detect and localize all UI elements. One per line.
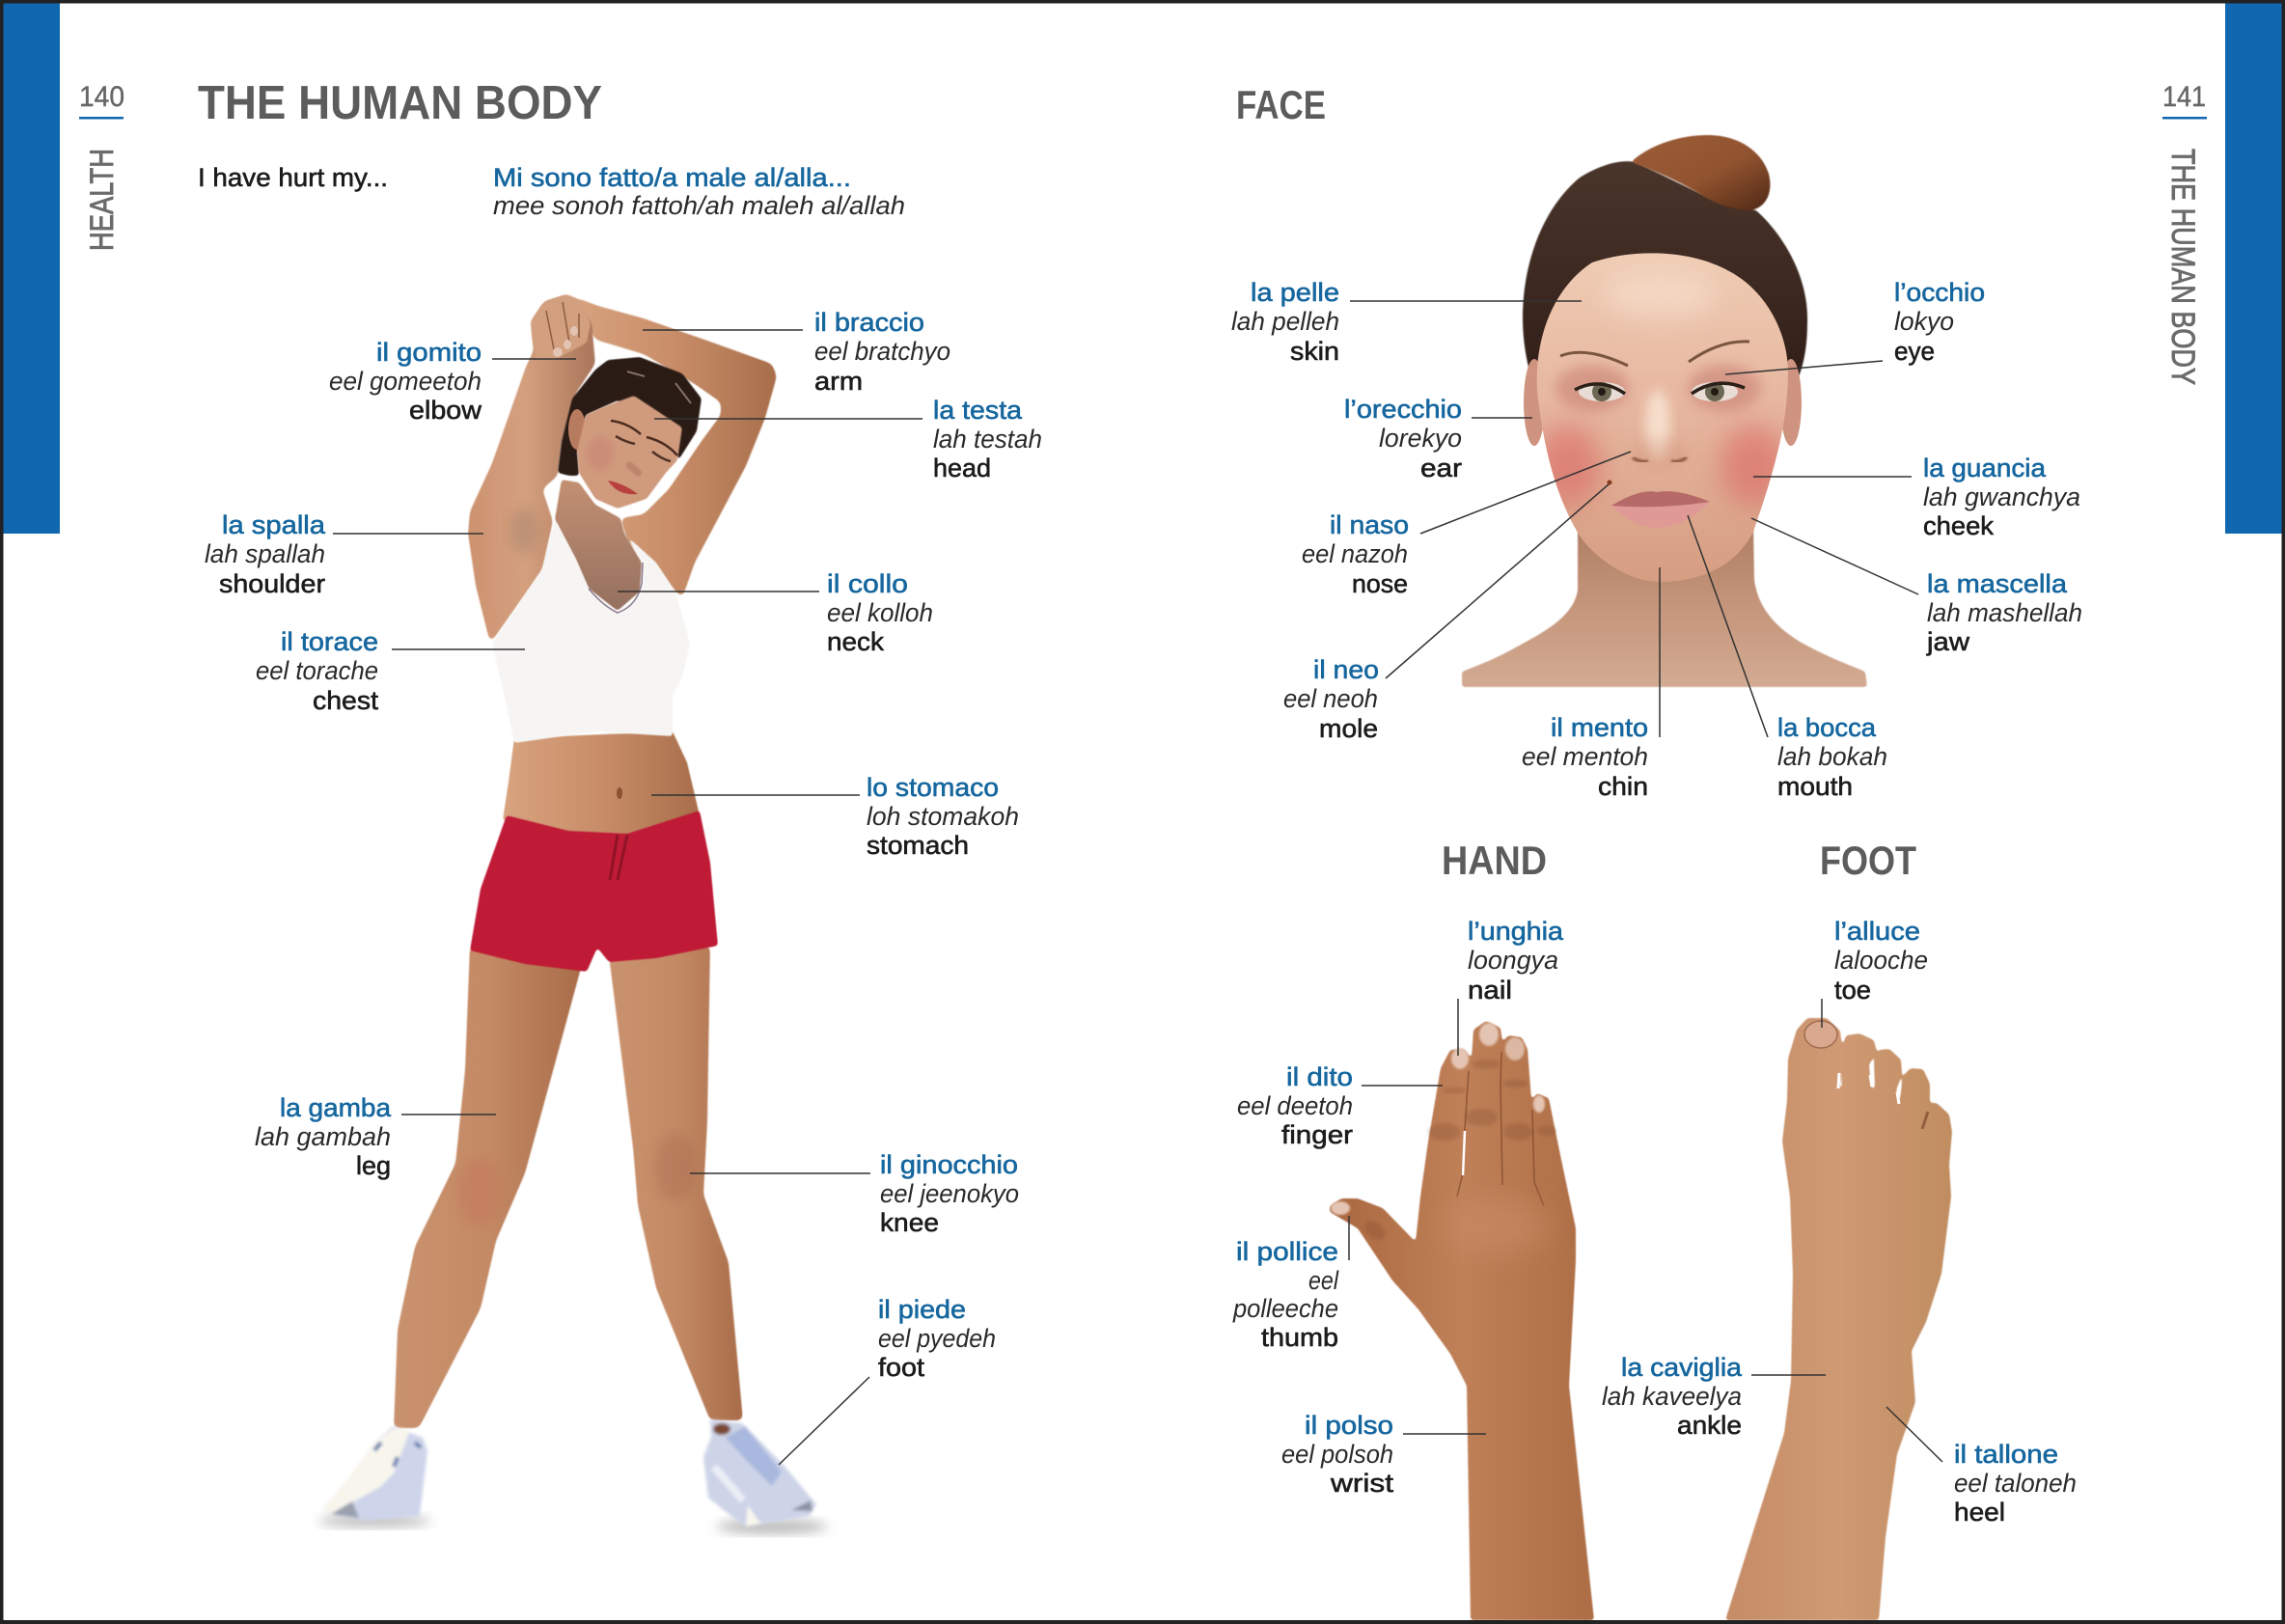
label: il mento / chin: eel mentoh xyxy=(1522,742,1648,771)
photo: face portrait xyxy=(1462,135,1867,687)
label: il braccio / arm: arm xyxy=(814,367,863,396)
knuckle highlight xyxy=(1443,1197,1549,1254)
hair bun xyxy=(1631,135,1770,210)
label: il collo / neck xyxy=(618,569,933,656)
label: la testa / head: head xyxy=(933,454,991,482)
label: il polso / wrist: eel polsoh xyxy=(1281,1440,1393,1469)
label: la bocca / mouth: la bocca xyxy=(1777,713,1877,742)
far arm xyxy=(572,296,777,598)
page frame bottom edge over photos xyxy=(0,1620,2285,1624)
label: la pelle / skin: skin xyxy=(1290,337,1339,366)
label: il ginocchio / knee: eel jeenokyo xyxy=(880,1179,1019,1208)
label: l'unghia / nail: l’unghia xyxy=(1468,917,1564,946)
label: il gomito / elbow: il gomito xyxy=(376,338,482,367)
label: la testa / head xyxy=(654,396,1042,482)
hair xyxy=(558,357,702,476)
panel: left blue side tab xyxy=(3,3,60,534)
phrase: I have hurt my: mee sonoh fattoh/ah maleh al/allah xyxy=(493,191,905,220)
label: l'occhio / eye xyxy=(1725,278,1985,374)
label: la spalla / shoulder: shoulder xyxy=(219,569,325,598)
label: l'occhio / eye: eye xyxy=(1894,337,1935,366)
label: la caviglia / ankle: la caviglia xyxy=(1621,1353,1743,1382)
label: la mascella / jaw: jaw xyxy=(1926,627,1970,656)
label: il dito / finger: eel deetoh xyxy=(1237,1091,1353,1120)
label: il piede / foot: eel pyedeh xyxy=(878,1324,996,1353)
eyes xyxy=(1579,382,1625,401)
neck and shoulders xyxy=(1462,521,1867,687)
brows xyxy=(1560,352,1628,366)
label: la pelle / skin xyxy=(1231,278,1582,366)
label: il tallone / heel xyxy=(1886,1407,2077,1527)
label: l'alluce / toe xyxy=(1822,917,1928,1028)
label: il ginocchio / knee xyxy=(690,1150,1019,1237)
phrase: I have hurt my: Mi sono fatto/a male al/alla... xyxy=(493,163,851,192)
face xyxy=(577,396,682,509)
heading: face: FACE xyxy=(1236,82,1326,127)
label: l'alluce / toe: lalooche xyxy=(1834,946,1928,975)
label: il polso / wrist: il polso xyxy=(1305,1411,1393,1440)
label: il piede / foot: foot xyxy=(878,1353,925,1382)
label: l'alluce / toe: l’alluce xyxy=(1834,917,1920,946)
label: il neo / mole: il neo xyxy=(1313,655,1379,684)
section tab label: the human body: THE HUMAN BODY xyxy=(2164,149,2201,385)
label: la mascella / jaw: la mascella xyxy=(1927,569,2068,598)
label: l'unghia / nail: loongya xyxy=(1468,946,1558,975)
label: il mento / chin xyxy=(1522,567,1660,801)
label: il neo / mole: eel neoh xyxy=(1283,684,1378,713)
shoe shadows xyxy=(318,1515,430,1527)
hand on top of head xyxy=(531,294,591,359)
hair highlights xyxy=(627,372,691,403)
label: il mento / chin: il mento xyxy=(1551,713,1648,742)
forehead highlight xyxy=(1602,271,1718,317)
mole xyxy=(1608,481,1611,484)
label: la guancia / cheek: cheek xyxy=(1923,511,1994,540)
white top xyxy=(492,519,690,743)
label: la caviglia / ankle: lah kaveelya xyxy=(1602,1382,1742,1411)
label: il pollice / thumb: polleeche xyxy=(1232,1294,1338,1323)
label: la guancia / cheek: la guancia xyxy=(1923,454,2047,482)
label: l'alluce / toe: toe xyxy=(1834,976,1871,1005)
label: il dito / finger: il dito xyxy=(1286,1062,1353,1091)
title: the human body: THE HUMAN BODY xyxy=(198,77,602,129)
label: l'occhio / eye: lokyo xyxy=(1894,307,1954,336)
label: la bocca / mouth: mouth xyxy=(1777,772,1853,801)
label: l'orecchio / ear: ear xyxy=(1420,454,1462,482)
nose xyxy=(1645,390,1670,459)
label: il polso / wrist xyxy=(1281,1411,1486,1498)
label: la gamba / leg xyxy=(255,1093,496,1180)
label: il mento / chin: chin xyxy=(1598,772,1648,801)
label: la spalla / shoulder: la spalla xyxy=(222,510,326,539)
label: il gomito / elbow xyxy=(329,338,576,425)
page number 140: 140 xyxy=(79,81,124,113)
label: il tallone / heel: il tallone xyxy=(1954,1440,2058,1469)
label: la testa / head: lah testah xyxy=(933,425,1042,454)
shoes xyxy=(322,1419,816,1527)
label: la spalla / shoulder xyxy=(205,510,483,598)
label: l'orecchio / ear: l’orecchio xyxy=(1344,395,1462,424)
label: l'occhio / eye: l’occhio xyxy=(1894,278,1985,307)
ear xyxy=(568,409,586,450)
label: la bocca / mouth xyxy=(1688,515,1887,801)
heading: hand: HAND xyxy=(1442,838,1547,883)
photo: foot xyxy=(1725,1018,1952,1620)
label: la bocca / mouth: lah bokah xyxy=(1777,742,1887,771)
face skin xyxy=(1536,253,1788,582)
label: il ginocchio / knee: knee xyxy=(880,1208,939,1237)
label: la caviglia / ankle: ankle xyxy=(1677,1411,1742,1440)
label: il dito / finger: finger xyxy=(1281,1120,1353,1149)
label: la caviglia / ankle xyxy=(1602,1353,1826,1440)
label: il torace / chest: eel torache xyxy=(256,656,378,685)
label: il torace / chest: chest xyxy=(313,686,379,715)
toe gaps xyxy=(1838,1073,1899,1104)
label: il collo / neck: neck xyxy=(827,627,885,656)
label: il braccio / arm xyxy=(643,308,950,396)
phrase: I have hurt my: I have hurt my... xyxy=(198,163,388,192)
label: il gomito / elbow: eel gomeetoh xyxy=(329,367,482,396)
heading: foot: FOOT xyxy=(1820,838,1916,883)
eye sockets xyxy=(1555,365,1629,411)
photo: hand xyxy=(1330,1021,1594,1620)
label: la pelle / skin: lah pelleh xyxy=(1231,307,1339,336)
label: il pollice / thumb: il pollice xyxy=(1236,1237,1338,1266)
cheeks xyxy=(1535,425,1601,506)
page number 141: 141 xyxy=(2162,81,2206,113)
label: la pelle / skin: la pelle xyxy=(1251,278,1339,307)
knuckle creases xyxy=(1362,1060,1556,1244)
label: il pollice / thumb xyxy=(1232,1216,1349,1352)
brows eyes lips xyxy=(611,421,677,455)
label: il naso / nose: eel nazoh xyxy=(1302,539,1408,568)
lips xyxy=(1611,491,1710,528)
label: il piede / foot xyxy=(779,1295,996,1465)
label: il braccio / arm: eel bratchyo xyxy=(814,337,950,366)
label: il neo / mole: mole xyxy=(1319,714,1378,743)
label: l'orecchio / ear xyxy=(1344,395,1532,482)
label: la gamba / leg: lah gambah xyxy=(255,1122,391,1151)
label: il gomito / elbow: elbow xyxy=(409,396,482,425)
label: la mascella / jaw xyxy=(1751,518,2082,656)
label: la guancia / cheek: lah gwanchya xyxy=(1923,482,2080,511)
midriff xyxy=(503,731,700,838)
nails xyxy=(1451,1048,1469,1069)
label: la testa / head: la testa xyxy=(933,396,1023,425)
label: la gamba / leg: la gamba xyxy=(280,1093,392,1122)
label: lo stomaco / stomach: stomach xyxy=(867,831,969,860)
label: la spalla / shoulder: lah spallah xyxy=(205,539,325,568)
finger gaps xyxy=(1457,1052,1544,1206)
ears xyxy=(1524,359,1545,446)
label: il pollice / thumb: eel xyxy=(1308,1266,1339,1295)
underarm shading xyxy=(510,508,537,554)
label: la gamba / leg: leg xyxy=(356,1151,391,1180)
label: la mascella / jaw: lah mashellah xyxy=(1927,598,2082,627)
photo: woman full body xyxy=(318,294,828,1533)
label: il braccio / arm: il braccio xyxy=(814,308,924,337)
legs xyxy=(394,946,743,1428)
label: l'unghia / nail xyxy=(1458,917,1564,1056)
label: il naso / nose: il naso xyxy=(1330,510,1409,539)
label: l'unghia / nail: nail xyxy=(1468,976,1512,1005)
panel: right blue side tab xyxy=(2225,3,2282,534)
label: il ginocchio / knee: il ginocchio xyxy=(880,1150,1018,1179)
label: il naso / nose: nose xyxy=(1352,569,1408,598)
label: la guancia / cheek xyxy=(1753,454,2080,540)
label: il piede / foot: il piede xyxy=(878,1295,966,1324)
label: il tallone / heel: eel taloneh xyxy=(1954,1469,2077,1498)
neck and chest skin xyxy=(555,480,642,611)
label: il collo / neck: il collo xyxy=(827,569,908,598)
shorts xyxy=(470,811,718,972)
label: l'orecchio / ear: lorekyo xyxy=(1379,424,1462,453)
label: il polso / wrist: wrist xyxy=(1330,1469,1394,1498)
toe nail xyxy=(1804,1021,1837,1048)
label: il torace / chest: il torace xyxy=(281,627,378,656)
label: lo stomaco / stomach xyxy=(651,773,1019,860)
label: lo stomaco / stomach: lo stomaco xyxy=(867,773,999,802)
label: il collo / neck: eel kolloh xyxy=(827,598,933,627)
phrase: I have hurt my xyxy=(198,163,905,220)
label: lo stomaco / stomach: loh stomakoh xyxy=(867,802,1019,831)
label: il pollice / thumb: thumb xyxy=(1261,1323,1338,1352)
label: il tallone / heel: heel xyxy=(1954,1498,2005,1527)
label: il neo / mole xyxy=(1283,484,1609,743)
label: il torace / chest xyxy=(256,627,525,715)
near arm xyxy=(468,294,595,644)
section tab label: health: HEALTH xyxy=(84,149,121,251)
hair xyxy=(1523,161,1807,405)
label: il dito / finger xyxy=(1237,1062,1443,1149)
label: il naso / nose xyxy=(1302,452,1631,598)
